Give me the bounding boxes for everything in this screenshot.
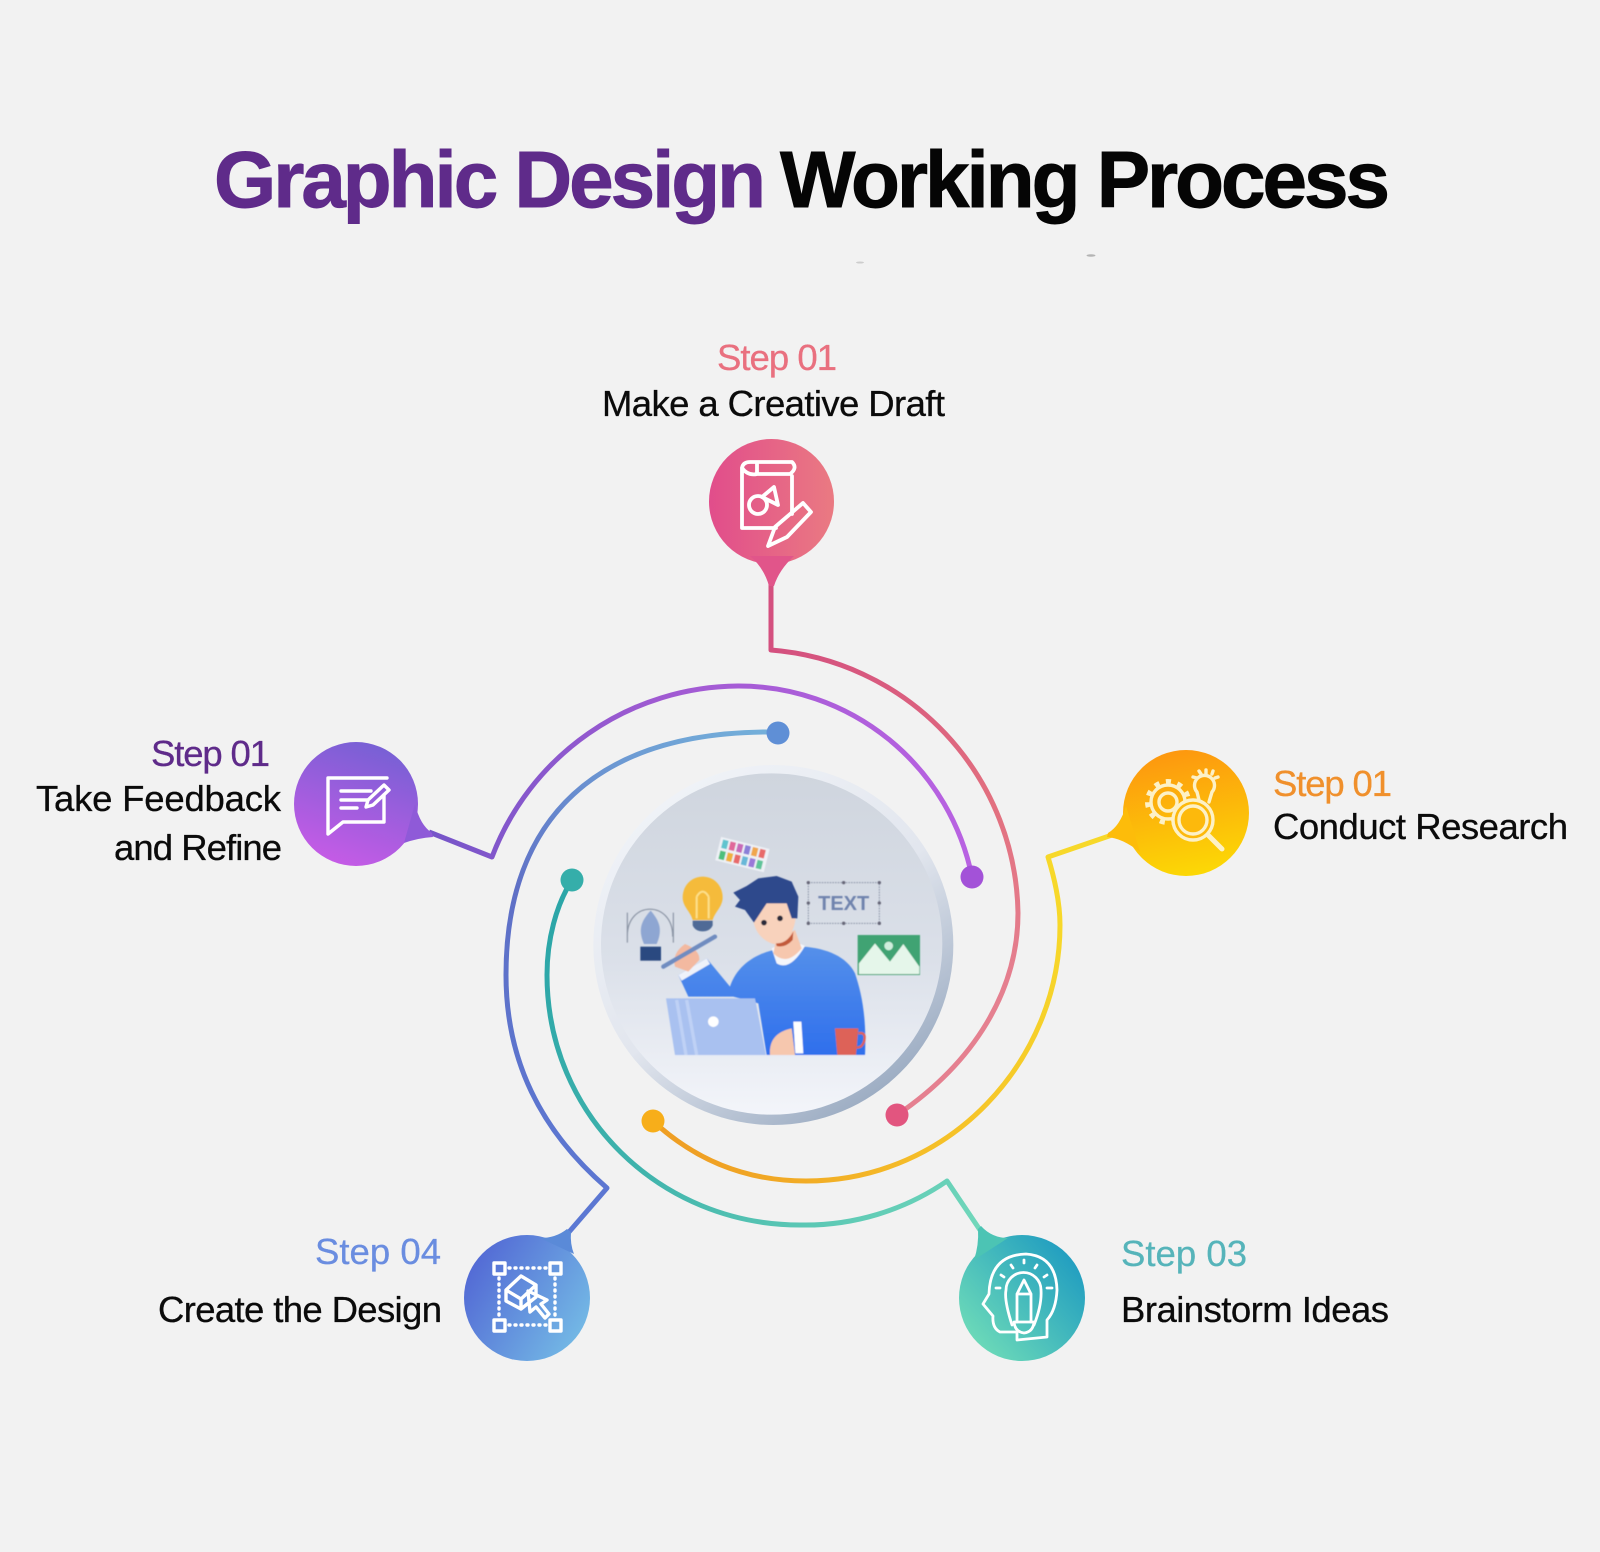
mug [835, 1028, 865, 1055]
step 4 node: create design [464, 1229, 590, 1361]
step 2 node: research [1107, 750, 1249, 876]
label: step 01 make a creative draft: Step 01 [717, 337, 837, 378]
label: step 01 make a creative draft [602, 337, 945, 424]
text frame [807, 881, 881, 925]
pin: design [464, 1229, 590, 1361]
pen tool [627, 909, 673, 961]
label: step 03 brainstorm ideas: Brainstorm Ideas [1121, 1289, 1389, 1330]
icon: bounding box with cube and cursor [494, 1263, 561, 1331]
icon: head with bulb [983, 1254, 1057, 1340]
label: step 04 create the design: Create the Design [158, 1289, 442, 1330]
speck marks [856, 254, 1096, 264]
laptop [666, 998, 865, 1056]
label: step 03 brainstorm ideas [1121, 1233, 1389, 1330]
label: step 01 take feedback and refine: and Refine [114, 827, 282, 868]
label: step 04 create the design [158, 1231, 442, 1330]
label: step 01 conduct research [1273, 763, 1568, 847]
label: step 01 conduct research: Conduct Research [1273, 806, 1568, 847]
illustration artwork [627, 837, 920, 1056]
label: step 01 conduct research: Step 01 [1273, 763, 1392, 804]
title: Working Process [780, 135, 1390, 224]
colour swatches [715, 837, 770, 872]
label: step 01 take feedback and refine [36, 733, 282, 868]
label: step 01 take feedback and refine: Take Feedback [36, 778, 282, 819]
step 3 node: brainstorm [959, 1226, 1085, 1361]
label: step 04 create the design: Step 04 [315, 1231, 441, 1272]
icon: chat with pencil [328, 778, 389, 834]
pin: draft [709, 439, 834, 586]
label: step 01 take feedback and refine: Step 01 [151, 733, 270, 774]
disk ring [593, 765, 953, 1125]
light bulb [683, 877, 723, 931]
icon: gears magnifier bulb [1148, 770, 1222, 849]
pin: brainstorm [959, 1226, 1085, 1361]
disk face [601, 773, 942, 1115]
label: step 03 brainstorm ideas: Step 03 [1121, 1233, 1247, 1274]
connector: draft pink arc [771, 575, 1018, 1126]
connector: brainstorm teal arc [547, 868, 980, 1230]
label: step 01 make a creative draft: Make a Creative Draft [602, 383, 945, 424]
center illustration [593, 765, 953, 1125]
connector: design blue arc [506, 722, 790, 1232]
pin: feedback [294, 742, 433, 866]
icon: document and pencil [742, 462, 811, 546]
connector: research yellow arc [642, 835, 1112, 1181]
designer figure [663, 876, 865, 1055]
step 1 node: draft [709, 439, 834, 586]
picture icon [858, 935, 920, 975]
connector: feedback purple arc [429, 686, 984, 888]
title: Graphic Design [214, 135, 766, 224]
text frame: TEXT [818, 893, 869, 915]
pin: research [1107, 750, 1249, 876]
title [214, 135, 1390, 224]
step 5 node: feedback [294, 742, 433, 866]
